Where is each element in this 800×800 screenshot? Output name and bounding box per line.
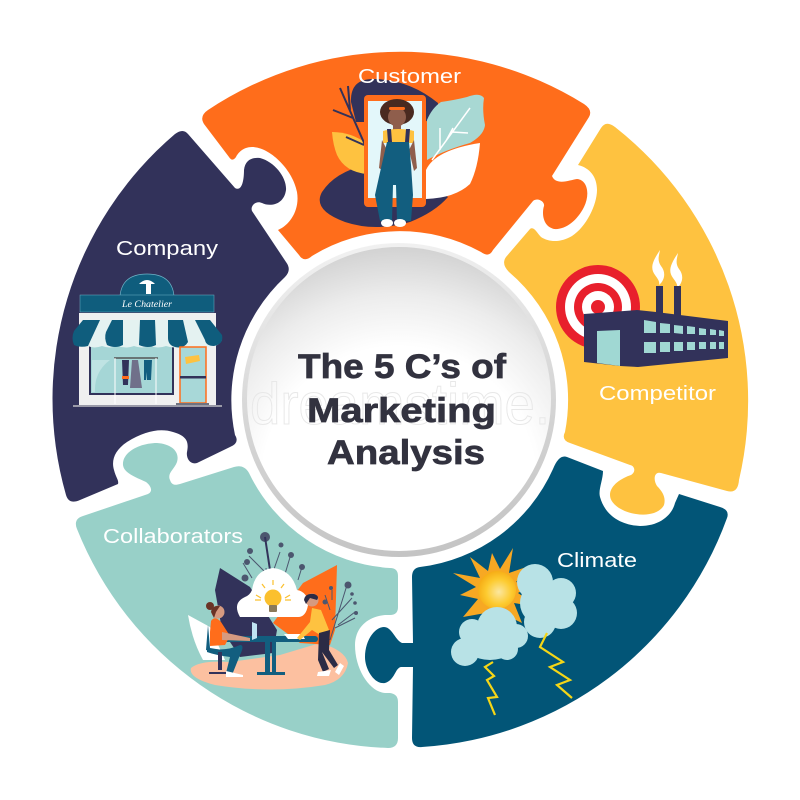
title xyxy=(298,348,507,472)
icon: sun behind clouds xyxy=(451,548,577,666)
puzzle piece: company xyxy=(53,131,289,502)
puzzle piece: customer xyxy=(202,52,590,259)
panel: competitor xyxy=(504,124,748,515)
label: Competitor: Competitor xyxy=(599,383,716,405)
title: The 5 C’s of xyxy=(298,348,507,386)
title: Marketing xyxy=(307,392,496,430)
icon: target xyxy=(556,265,640,349)
illustration: team at table xyxy=(188,532,358,690)
title: Analysis xyxy=(327,434,485,472)
puzzle piece: climate xyxy=(365,456,728,747)
watermark: dreamstime. xyxy=(250,372,550,437)
label: Customer: Customer xyxy=(358,66,461,88)
label: Company: Company xyxy=(116,238,218,260)
icon: lightning bolts xyxy=(485,633,572,715)
illustration: storefront: Le Chatelier xyxy=(121,300,172,310)
center circle xyxy=(242,243,556,557)
icon: factory xyxy=(584,250,728,367)
panel: customer xyxy=(202,52,590,259)
puzzle piece: competitor xyxy=(504,124,748,515)
illustration: customer with phone xyxy=(320,79,485,227)
label: Climate: Climate xyxy=(557,550,637,572)
illustration: storefront xyxy=(72,274,222,407)
label: Collaborators: Collaborators xyxy=(103,526,243,548)
panel: climate xyxy=(365,456,728,747)
panel: company xyxy=(53,131,289,502)
panel: collaborators xyxy=(76,443,398,748)
puzzle piece: collaborators xyxy=(76,443,398,748)
